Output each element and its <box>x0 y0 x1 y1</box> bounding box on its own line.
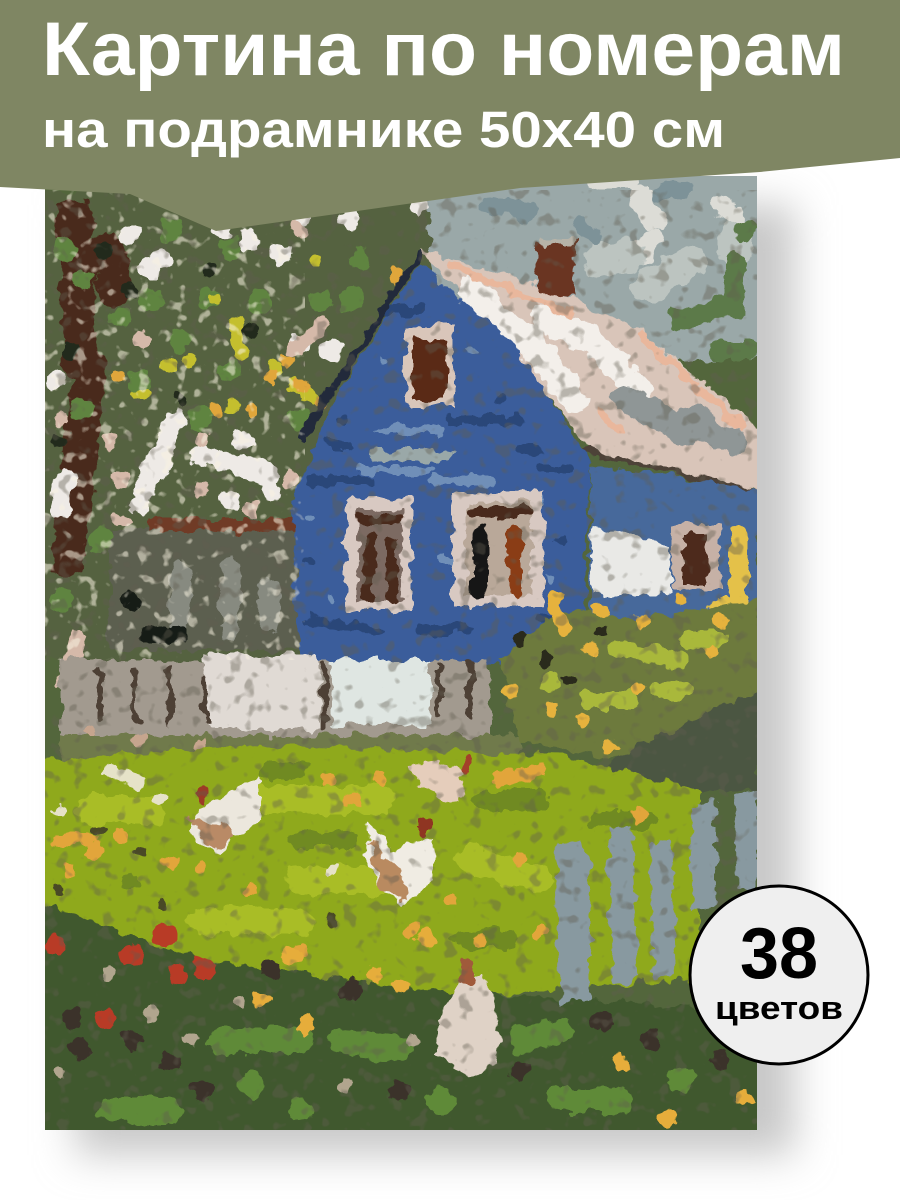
badge: 38 colours: 38 <box>740 914 818 994</box>
title: Картина по номерам <box>42 7 845 92</box>
house front <box>292 255 590 665</box>
lawn <box>40 745 700 1000</box>
right grey fence <box>555 790 757 1005</box>
chickens <box>185 760 500 1075</box>
sky <box>425 176 757 364</box>
badge: 38 colours <box>690 886 868 1064</box>
painted dab texture, tree area <box>45 190 305 660</box>
foreground flowers <box>30 900 770 1140</box>
header banner <box>0 0 900 231</box>
side wall <box>590 465 760 620</box>
subtitle: на подрамнике 50х40 см <box>42 101 725 158</box>
badge: 38 colours: цветов <box>715 990 843 1026</box>
distant tree right <box>680 230 750 350</box>
left tree mass <box>30 190 430 680</box>
roof <box>420 240 760 490</box>
white fence <box>60 655 520 765</box>
painted dab texture, dark strokes <box>45 190 757 1130</box>
canvas drop shadow <box>75 205 795 1155</box>
shrubs right of house <box>500 600 760 790</box>
painting: village house with chickens <box>30 160 780 1140</box>
